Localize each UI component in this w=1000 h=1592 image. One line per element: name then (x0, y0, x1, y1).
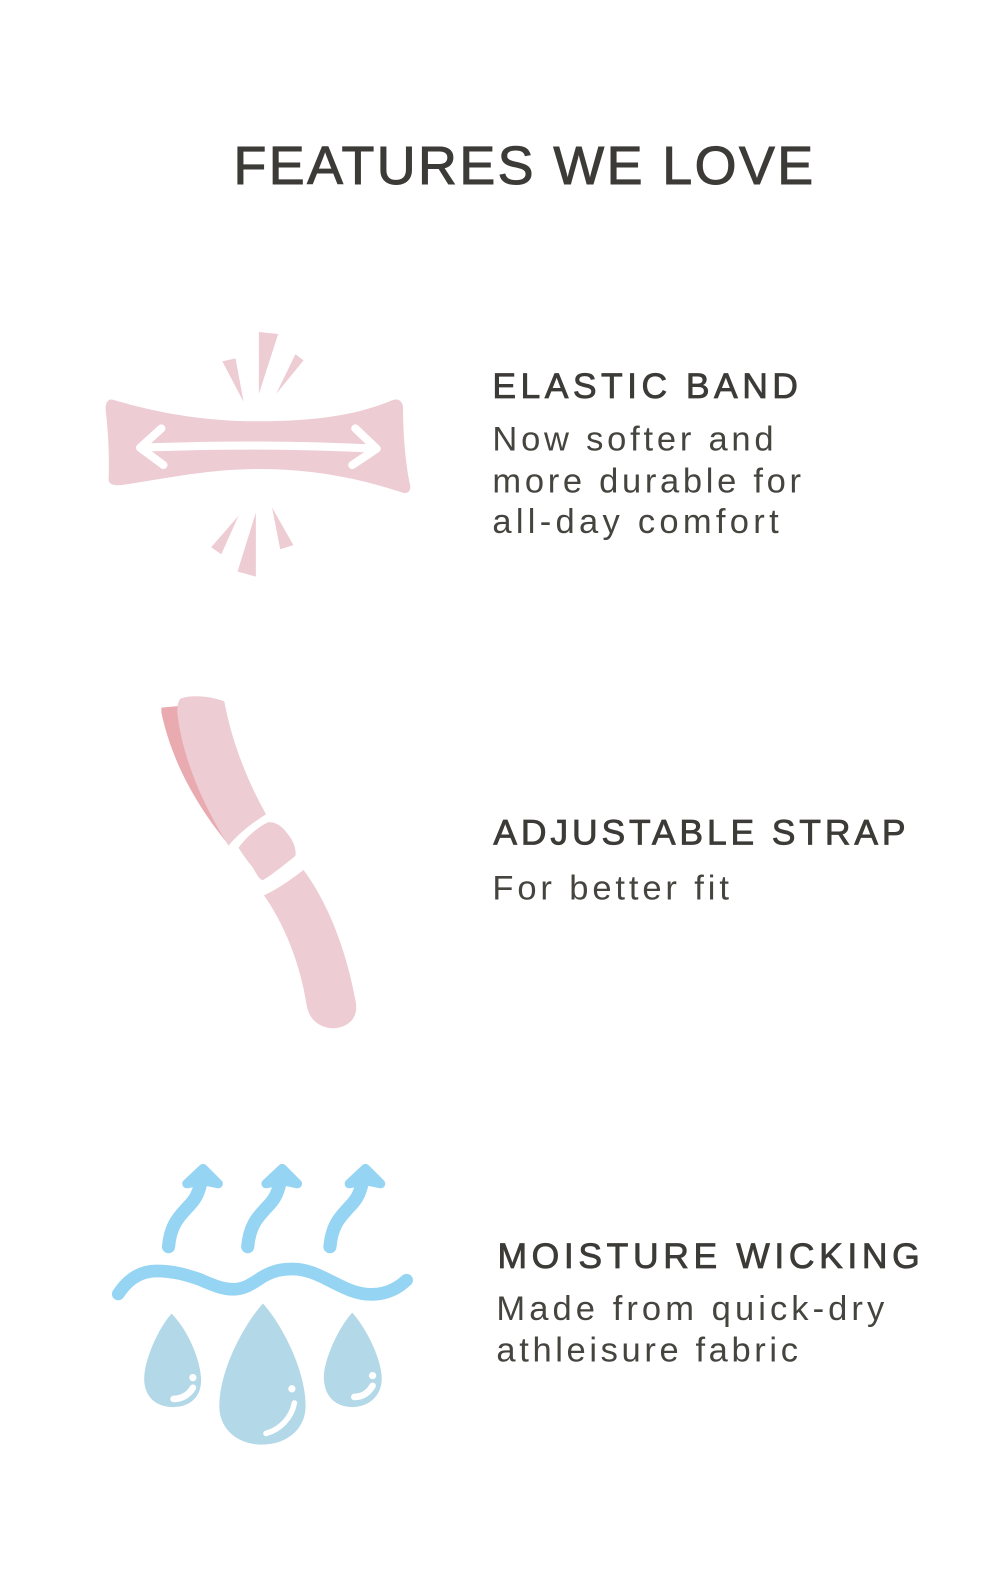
icon: arrows, fabric wave and droplets (118, 1168, 407, 1445)
heading: moisture wicking: MOISTURE WICKING (497, 1236, 920, 1276)
icon: stretched elastic band (106, 332, 410, 577)
text: moisture wicking description: athleisure fabric (496, 1331, 798, 1369)
heading: adjustable strap: ADJUSTABLE STRAP (493, 813, 906, 853)
icon: fabric wave (118, 1269, 407, 1294)
text: elastic band description (492, 421, 801, 541)
title: FEATURES WE LOVE (233, 136, 813, 196)
icon: water droplets (144, 1304, 382, 1445)
panel: moisture wicking (118, 1168, 920, 1445)
text: elastic band description: Now softer and (492, 421, 774, 459)
icon: upward arrows (169, 1168, 381, 1247)
panel: elastic band (106, 332, 801, 577)
text: elastic band description: all-day comfort (492, 503, 779, 541)
text: adjustable strap description: For better fit (492, 869, 729, 907)
text: moisture wicking description (496, 1290, 885, 1369)
text: elastic band description: more durable for (492, 462, 801, 500)
heading: elastic band: ELASTIC BAND (492, 366, 798, 406)
icon: strap with slider (161, 696, 356, 1028)
panel: adjustable strap (161, 696, 906, 1028)
text: moisture wicking description: Made from quick-dry (496, 1290, 885, 1328)
